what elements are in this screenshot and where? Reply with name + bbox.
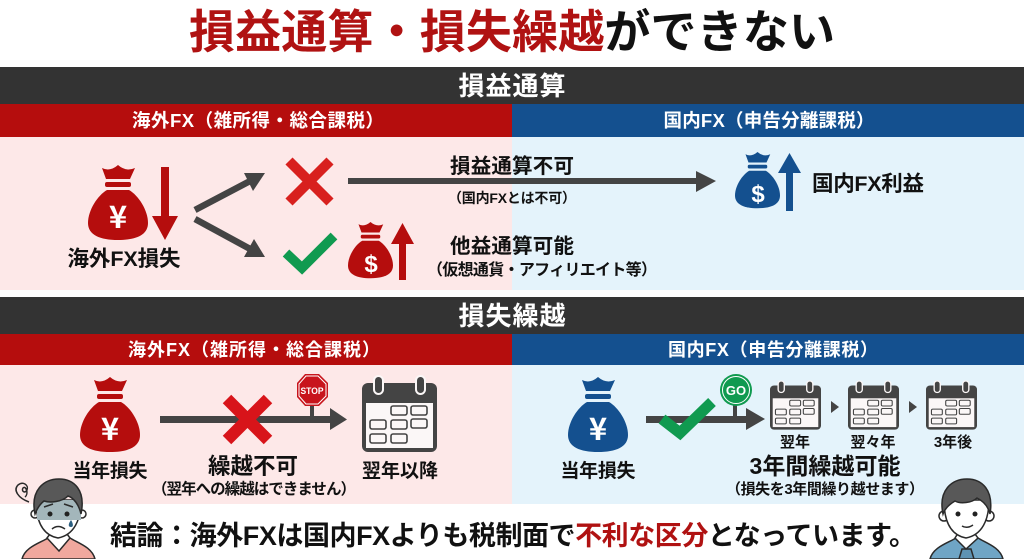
panel header: 国内FX	[512, 104, 1024, 137]
label: 海外FX損失: 海外FX損失	[68, 247, 181, 271]
icon: yen money bag with down arrow: ¥	[109, 192, 127, 237]
icon: red cross	[227, 399, 268, 440]
arrow: allowed	[646, 408, 765, 430]
icon: yen money bag: ¥	[589, 404, 607, 449]
panel: 海外FX loss carryforward	[0, 334, 512, 504]
label: 翌々年: 翌々年	[850, 433, 896, 451]
panel header: 国内FX: 国内FX（申告分離課税）	[668, 340, 878, 360]
panel header: 国内FX	[512, 334, 1024, 365]
icon: red cross	[289, 161, 330, 202]
section heading bar: 損益通算: 損益通算	[458, 71, 566, 101]
panel: 海外FX profit and loss offset	[0, 104, 512, 290]
label: 翌年: 翌年	[780, 433, 810, 451]
icon: calendar 2	[848, 381, 899, 430]
icon: blue dollar money bag with up arrow	[735, 152, 801, 211]
note: 国内FXとは不可: （国内FXとは不可）	[448, 190, 576, 206]
note: 翌年への繰越はできません: （翌年への繰越はできません）	[152, 479, 356, 498]
arrow: to allowed	[195, 219, 265, 257]
icon: stop sign	[297, 374, 328, 418]
icon: yen money bag: ¥	[101, 404, 119, 449]
label: 翌年以降: 翌年以降	[362, 459, 438, 482]
panel header: 海外FX: 海外FX（雑所得・総合課税）	[132, 110, 384, 131]
arrow: to not allowed	[195, 173, 265, 210]
arrow: small triangle 1	[831, 401, 839, 413]
label: 他益通算可能: 他益通算可能	[450, 235, 574, 258]
panel header: 国内FX: 国内FX（申告分離課税）	[664, 110, 874, 131]
label: 3年後: 3年後	[934, 433, 972, 451]
panel: 国内FX loss carryforward	[512, 334, 1024, 504]
icon: dollar money bag with up arrow	[348, 222, 414, 280]
person: smiling man	[930, 479, 1003, 559]
icon: dollar money bag with up arrow: $	[364, 251, 378, 278]
section heading bar: 損益通算	[0, 67, 1024, 104]
icon: green check	[286, 236, 334, 268]
conclusion text: 結論：海外FXは国内FXよりも税制面で不利な区分となっています。	[110, 521, 916, 551]
arrow: blocked	[160, 408, 347, 430]
section: 損益通算	[0, 67, 1024, 290]
label: 損益通算不可: 損益通算不可	[450, 155, 574, 178]
panel: 国内FX profit and loss offset	[512, 104, 1024, 290]
panel header: 海外FX	[0, 104, 512, 137]
icon: calendar 1	[770, 381, 821, 430]
icon: go sign: GO	[726, 383, 746, 398]
note: 損失を3年間繰り越せます: （損失を3年間繰り越せます）	[726, 480, 924, 498]
section: 損失繰越	[0, 297, 1024, 504]
label: 3年間繰越可能: 3年間繰越可能	[750, 453, 900, 479]
person: worried man	[16, 479, 95, 559]
icon: yen money bag	[80, 377, 140, 452]
icon: green check	[662, 402, 712, 433]
panel header: 海外FX: 海外FX（雑所得・総合課税）	[128, 340, 380, 360]
icon: go sign	[720, 374, 752, 418]
icon: yen money bag	[568, 377, 628, 452]
label: 国内FX利益: 国内FX利益	[812, 172, 924, 196]
icon: stop sign: STOP	[300, 386, 324, 397]
icon: blue dollar money bag with up arrow: $	[751, 181, 765, 208]
arrow: small triangle 2	[909, 401, 917, 413]
label: 当年損失: 当年損失	[72, 459, 148, 482]
icon: calendar	[362, 376, 437, 452]
label: 繰越不可: 繰越不可	[208, 454, 298, 479]
panel header: 海外FX	[0, 334, 512, 365]
icon: yen money bag with down arrow	[88, 165, 178, 240]
label: 当年損失: 当年損失	[560, 459, 636, 482]
arrow: offset not allowed	[348, 171, 716, 192]
section heading bar: 損失繰越: 損失繰越	[458, 301, 566, 331]
section heading bar: 損失繰越	[0, 297, 1024, 334]
title: 損益通算・損失繰越ができない	[189, 6, 835, 58]
icon: calendar 3	[926, 381, 977, 430]
note: 仮想通貨・アフィリエイト等: （仮想通貨・アフィリエイト等）	[427, 260, 657, 279]
